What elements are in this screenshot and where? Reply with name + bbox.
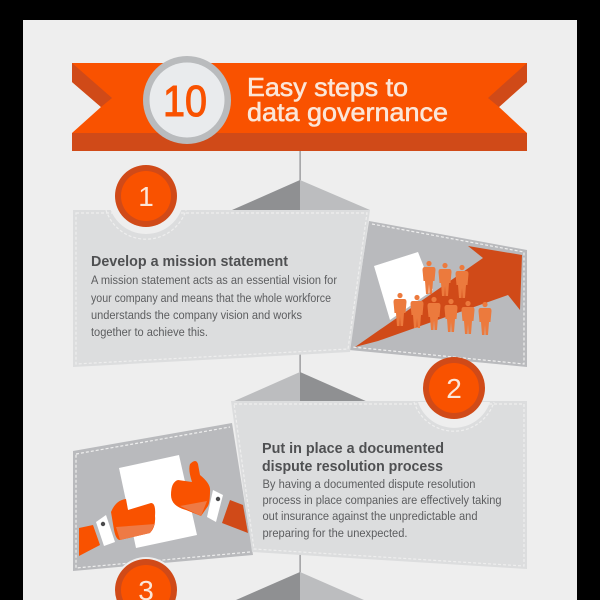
- badge: step 2: [423, 357, 485, 419]
- image panel: team and growth arrow: [349, 221, 527, 367]
- badge: step 2: 2: [446, 373, 462, 404]
- heading: step 2: [262, 441, 444, 475]
- panel: step 1: [73, 158, 370, 367]
- icon: document: [374, 252, 433, 320]
- pyramid 1: [232, 180, 370, 210]
- step 1 halo: [106, 158, 186, 239]
- text: step 2 body: By having a documented dispute resolution: [262, 477, 476, 491]
- image panel: thumbs up hands: [73, 423, 253, 571]
- text: step 2 body: preparing for the unexpected.: [262, 526, 408, 540]
- text: step 2 body: out insurance against the unpredictable and: [262, 509, 478, 523]
- banner heading: data governance: [247, 97, 448, 127]
- text: step 2 body: [262, 477, 502, 540]
- text: step 1 body: your company and means that the whole workforce: [91, 291, 331, 305]
- step 2 halo: [414, 402, 494, 431]
- connector line: [300, 151, 301, 600]
- badge: 10: [143, 56, 231, 144]
- icon: document: [119, 455, 197, 548]
- pyramid 3: [236, 572, 364, 600]
- heading: step 2: dispute resolution process: [262, 459, 443, 475]
- text: step 1 body: understands the company vision and works: [91, 308, 302, 322]
- heading: step 1: Develop a mission statement: [91, 254, 288, 270]
- text: step 2 body: process in place companies are effectively taking: [262, 493, 502, 507]
- banner heading: Easy steps to: [247, 72, 408, 102]
- icon: people: [394, 261, 492, 335]
- pyramid 2: [232, 372, 368, 402]
- badge: step 1: [115, 165, 177, 227]
- text: step 1 body: [91, 273, 337, 339]
- banner heading: [247, 72, 448, 127]
- icon: left hand: [79, 499, 155, 556]
- badge: 10: 10: [163, 77, 207, 126]
- panel: step 2: [231, 401, 527, 569]
- badge: step 1: 1: [138, 181, 154, 212]
- text: step 1 body: A mission statement acts as an essential vision for: [91, 273, 337, 287]
- title banner: [72, 56, 527, 151]
- heading: step 2: Put in place a documented: [262, 441, 444, 457]
- text: step 1 body: together to achieve this.: [91, 325, 208, 339]
- badge: step 3: [113, 557, 179, 600]
- icon: growth arrow: [355, 246, 522, 347]
- icon: right hand: [171, 461, 248, 533]
